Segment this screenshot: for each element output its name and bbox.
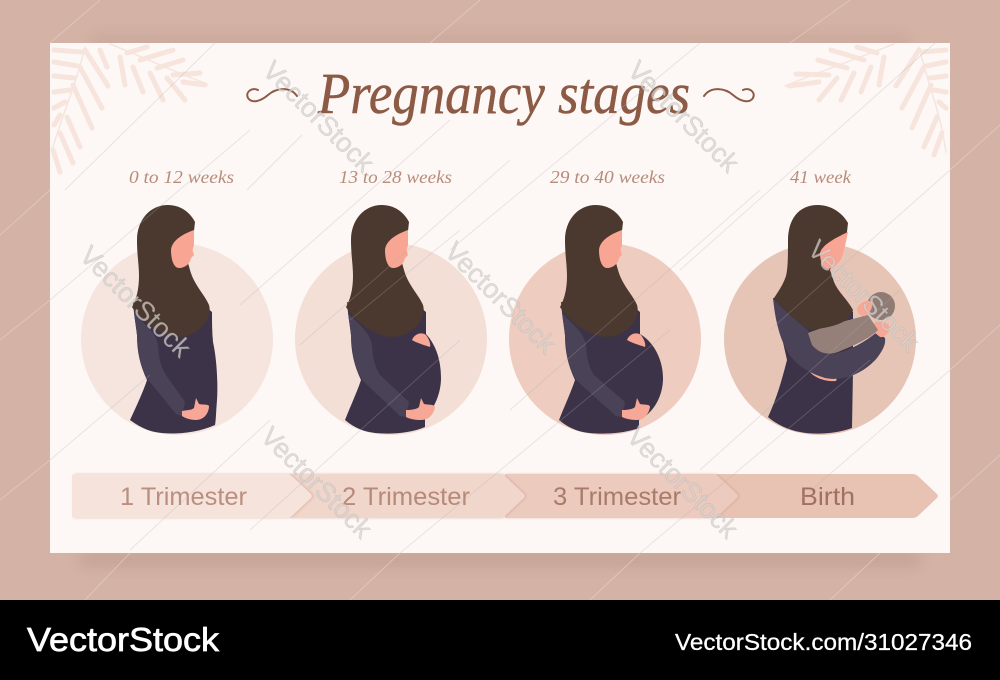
label: Birth: Birth: [800, 483, 855, 511]
watermark: VectorStock: [802, 234, 925, 358]
face: [171, 230, 194, 268]
title text: Pregnancy stages: [317, 61, 690, 126]
label: 0 to 12 weeks: 0 to 12 weeks: [129, 167, 234, 187]
stage circles: [81, 243, 916, 435]
face: [599, 230, 622, 268]
hair: [346, 205, 424, 337]
right frond group: [785, 44, 946, 155]
hair: [774, 205, 853, 330]
title: [247, 61, 754, 126]
footer background: [0, 600, 1000, 680]
footer bar: [0, 600, 1000, 680]
arrow: Birth: [716, 474, 938, 518]
face: [820, 232, 848, 269]
watermark: VectorStock: [255, 421, 378, 545]
decoration: palm leaves top left: [52, 44, 207, 172]
dress: [130, 302, 217, 434]
card shadow: [80, 36, 920, 566]
arm: [348, 312, 409, 417]
baby head: [867, 292, 895, 320]
watermark: VectorStock: [621, 421, 744, 545]
baby blanket: [808, 315, 878, 354]
circle 1: [81, 243, 273, 435]
lower hand: [622, 398, 650, 420]
lower hand: [406, 398, 435, 420]
watermark: VectorStock: [622, 55, 745, 179]
footer url: VectorStock.com/31027346: [675, 629, 972, 655]
panel: main card: [50, 43, 950, 553]
upper hand: [627, 333, 645, 347]
figure: second trimester: [345, 205, 441, 434]
hair: [560, 205, 638, 337]
watermark: VectorStock: [74, 240, 197, 364]
arrow: 3 Trimester: [505, 474, 738, 518]
dress: [345, 302, 441, 434]
week labels: [129, 167, 852, 187]
upper hand: [412, 333, 430, 347]
flourish right: [704, 89, 754, 101]
feeding hand: [857, 301, 872, 316]
lower hand: [810, 368, 838, 381]
label: 13 to 28 weeks: 13 to 28 weeks: [339, 167, 452, 187]
footer brand: VectorStock: [27, 621, 220, 658]
arm: [562, 312, 625, 417]
label: 3 Trimester: 3 Trimester: [553, 483, 681, 511]
circle 4: [724, 243, 916, 435]
watermark: VectorStock: [257, 55, 380, 179]
label: 2 Trimester: 2 Trimester: [342, 483, 470, 511]
decoration: palm leaves top right: [785, 44, 946, 155]
arrow: 2 Trimester: [290, 474, 525, 518]
watermark: VectorStock: [439, 236, 562, 360]
figure: third trimester: [559, 205, 663, 434]
dress: [768, 298, 853, 434]
hand: [182, 398, 209, 420]
baby hand lower: [874, 322, 890, 337]
figure: first trimester: [130, 205, 217, 434]
flourish left: [247, 89, 297, 101]
hair: [132, 205, 210, 337]
label: 1 Trimester: 1 Trimester: [120, 483, 247, 511]
arm: [134, 312, 185, 416]
arrow: 1 Trimester: [72, 474, 312, 518]
watermarks: [74, 55, 925, 545]
trimester arrow band: [72, 474, 938, 518]
label: 29 to 40 weeks: 29 to 40 weeks: [550, 167, 665, 187]
sleeve: [773, 298, 885, 379]
figure: mother with newborn: [768, 205, 895, 434]
face: [385, 230, 408, 268]
label: 41 week: 41 week: [790, 167, 852, 187]
watermark scratch lines: [50, 43, 950, 553]
circle 2: [295, 243, 487, 435]
circle 3: [509, 243, 701, 435]
dress: [559, 302, 663, 434]
